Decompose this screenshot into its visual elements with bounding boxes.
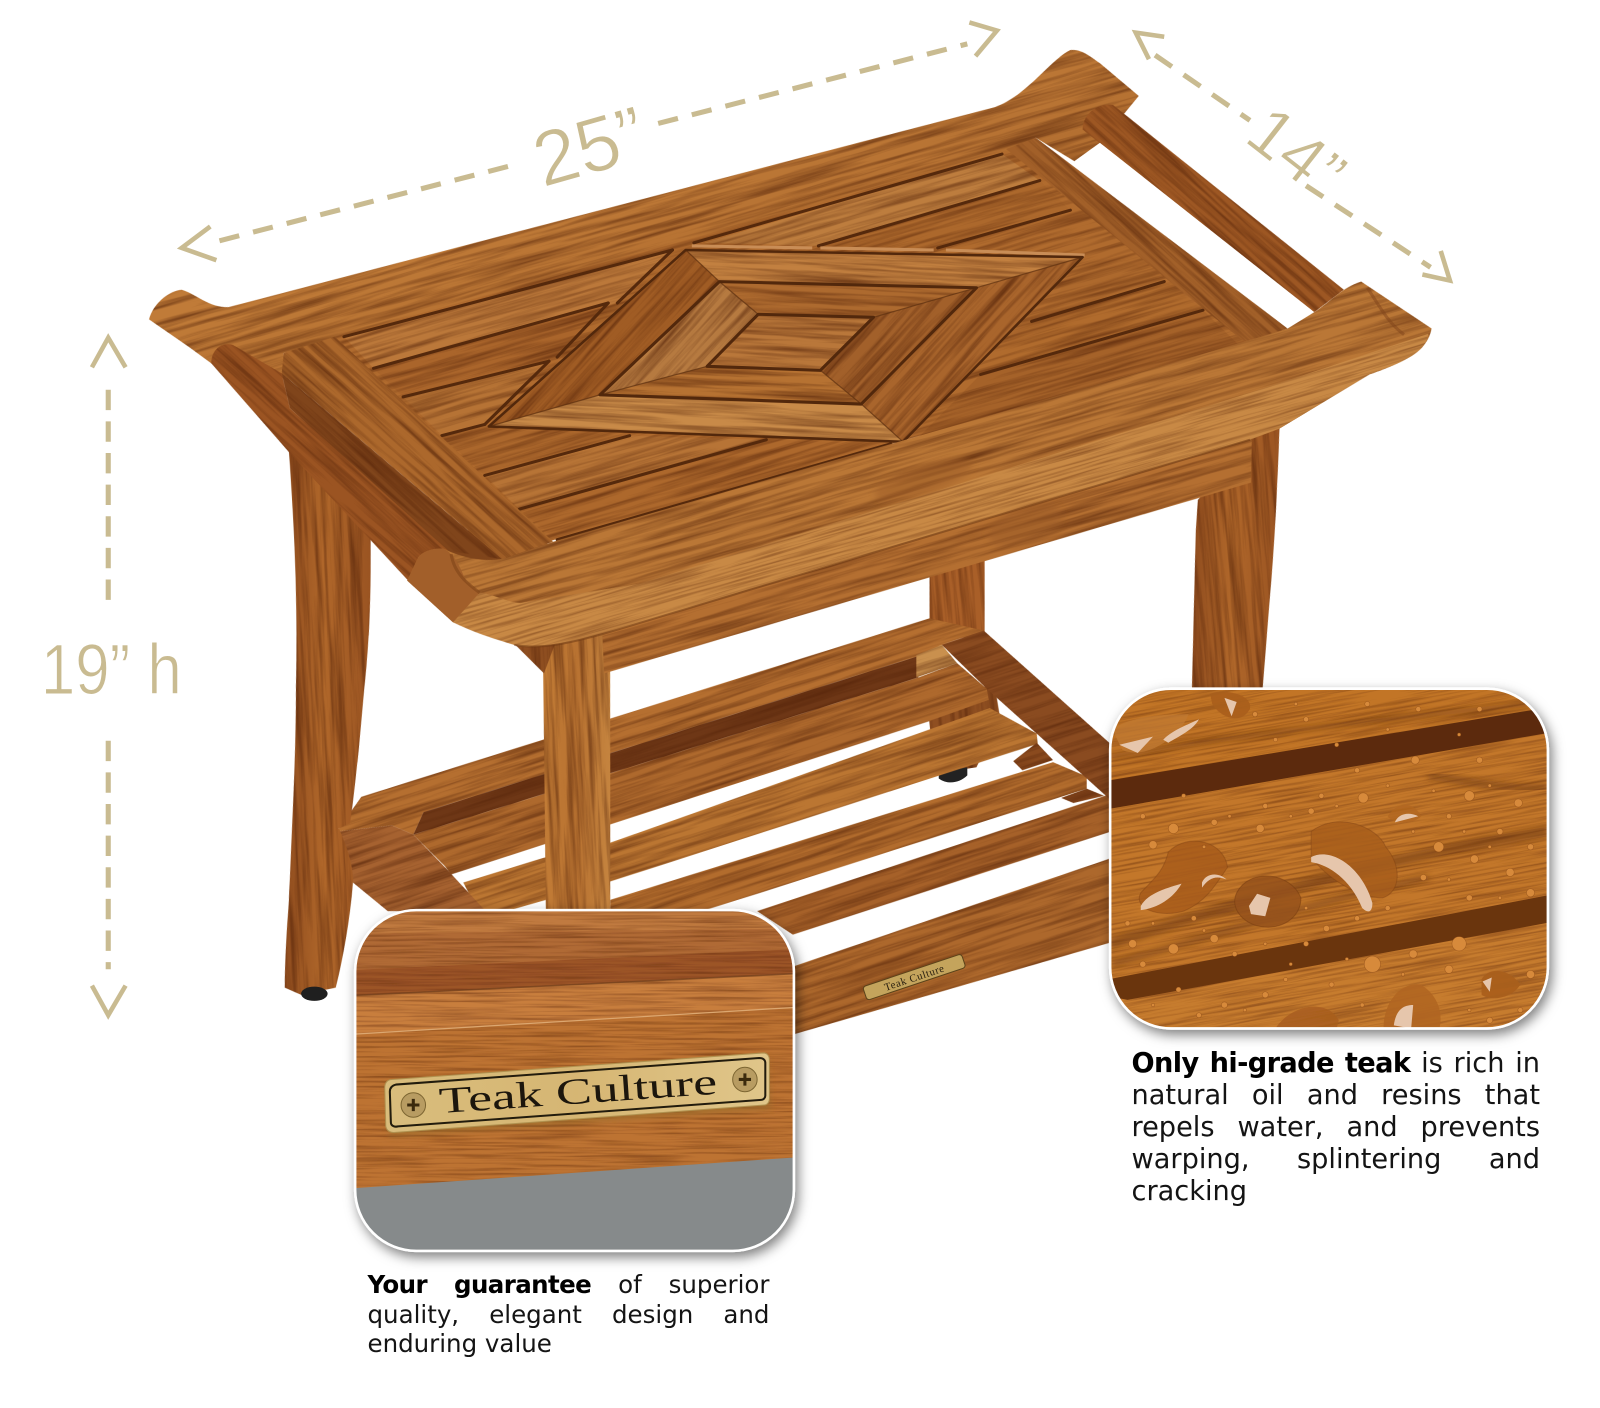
- left front leg: [256, 445, 399, 999]
- shelf back rail dark recess: [413, 656, 918, 835]
- panel 2 border: [355, 910, 794, 1251]
- brass plate screws: [401, 1067, 757, 1117]
- panel: water beading close-up: [1103, 684, 1561, 1044]
- caption: guarantee: quality, elegant design and: [368, 1300, 770, 1328]
- inner diamond top band: [719, 282, 977, 317]
- outer diamond left band: [489, 250, 719, 426]
- caption: guarantee: [367, 1270, 770, 1358]
- panel: brass nameplate close-up: [347, 898, 801, 1255]
- groove edge shadow: [347, 973, 801, 996]
- dark grain streaks: [1110, 704, 1548, 964]
- top board: [1108, 686, 1538, 780]
- groove 2: [1102, 894, 1556, 1000]
- shelf back rail: [337, 618, 984, 835]
- outer diamond top band: [686, 250, 1083, 288]
- brass plate: [385, 1053, 770, 1137]
- dimension arrow: 25 inch width: [182, 22, 997, 260]
- seat top light strips: [692, 246, 1085, 255]
- caption: hi-grade teak: warping, splintering and: [1132, 1144, 1540, 1174]
- diamond outlines: [489, 250, 1083, 442]
- center diamond: [707, 314, 873, 370]
- right seat bar: [1006, 138, 1288, 344]
- groove 1: [1102, 706, 1556, 810]
- shelf front rail: [793, 855, 1120, 1035]
- left rod: [211, 344, 454, 581]
- brass plate: Teak Culture: [438, 1061, 718, 1121]
- shelf slat 4: [757, 791, 1120, 935]
- seat slat grooves: [344, 154, 1240, 540]
- small brass nameplate on shelf rail: Teak Culture: [883, 962, 946, 994]
- rear legs: [896, 396, 1310, 803]
- middle board: [1102, 731, 1556, 1005]
- inner diamond bottom band: [600, 366, 861, 404]
- dimension arrow: 19 inch height: [41, 338, 182, 1015]
- icon: rear rubber foot: [939, 767, 967, 782]
- inner diamond left band: [600, 282, 758, 395]
- caption: hi-grade teak: Only hi-grade teak is rich in: [1132, 1048, 1540, 1078]
- left rod channel: [282, 373, 502, 559]
- small brass nameplate on shelf rail: [863, 954, 966, 1000]
- caption: hi-grade teak: cracking: [1132, 1176, 1247, 1206]
- shelf right side rail: [942, 631, 1117, 806]
- top blurred band: [370, 911, 775, 934]
- gray floor: [352, 1156, 804, 1264]
- back rim: [149, 50, 1139, 380]
- caption: hi-grade teak: [1132, 1048, 1540, 1206]
- ledge highlight: [347, 1007, 801, 1035]
- front rim: [310, 10, 1528, 918]
- board front face: [347, 1007, 801, 1189]
- caption: guarantee: Your guarantee of superior: [368, 1270, 769, 1299]
- lower shelf: [214, 388, 1243, 1265]
- seat apron: [539, 261, 1316, 846]
- diamond inlay: [393, 0, 1178, 737]
- front rim knots and highlights: [451, 288, 1404, 647]
- drop highlights: [1119, 698, 1492, 1028]
- small water droplets: [1125, 701, 1535, 1023]
- rim end cap: [407, 549, 480, 622]
- dimension arrow: 14 inch depth: 14”: [1233, 91, 1360, 214]
- dark groove: [347, 949, 801, 997]
- bottom board: [1102, 918, 1556, 1036]
- caption: guarantee: enduring value: [368, 1329, 552, 1358]
- front center leg: [500, 626, 625, 923]
- white slot beside right bar: [1074, 143, 1314, 329]
- shelf slat 3: [610, 762, 1087, 926]
- dimension arrow: 19 inch height: 19” h: [41, 630, 182, 710]
- large water drops: [1112, 692, 1520, 1030]
- seat slat tones: [704, 154, 1040, 246]
- front rim lighter band: [370, 75, 1511, 905]
- left seat bar: [282, 337, 553, 559]
- right rod: [1083, 105, 1344, 312]
- panel 1 border: [1110, 689, 1548, 1028]
- shelf slat 2: [463, 708, 1038, 918]
- inner diamond right band: [820, 288, 977, 404]
- seat backing: [408, 531, 556, 607]
- icon: left rubber foot: [301, 987, 328, 1001]
- dimension arrow: 14 inch depth: [1136, 33, 1450, 281]
- shelf filler blocks by side rail: [1013, 743, 1053, 770]
- shelf slat 1: [413, 663, 989, 874]
- blurred recess: [356, 928, 788, 970]
- outer diamond bottom band: [489, 395, 903, 442]
- upper ledge: [347, 973, 801, 1036]
- outer diamond right band: [861, 257, 1083, 442]
- caption: hi-grade teak: repels water, and prevents: [1132, 1112, 1540, 1142]
- caption: hi-grade teak: natural oil and resins that: [1132, 1080, 1540, 1110]
- shelf light corner: [916, 645, 957, 677]
- dimension arrow: 25 inch width: 25”: [524, 90, 655, 204]
- shelf left end rail: [337, 825, 486, 911]
- slatted seat panel: [306, 150, 1247, 541]
